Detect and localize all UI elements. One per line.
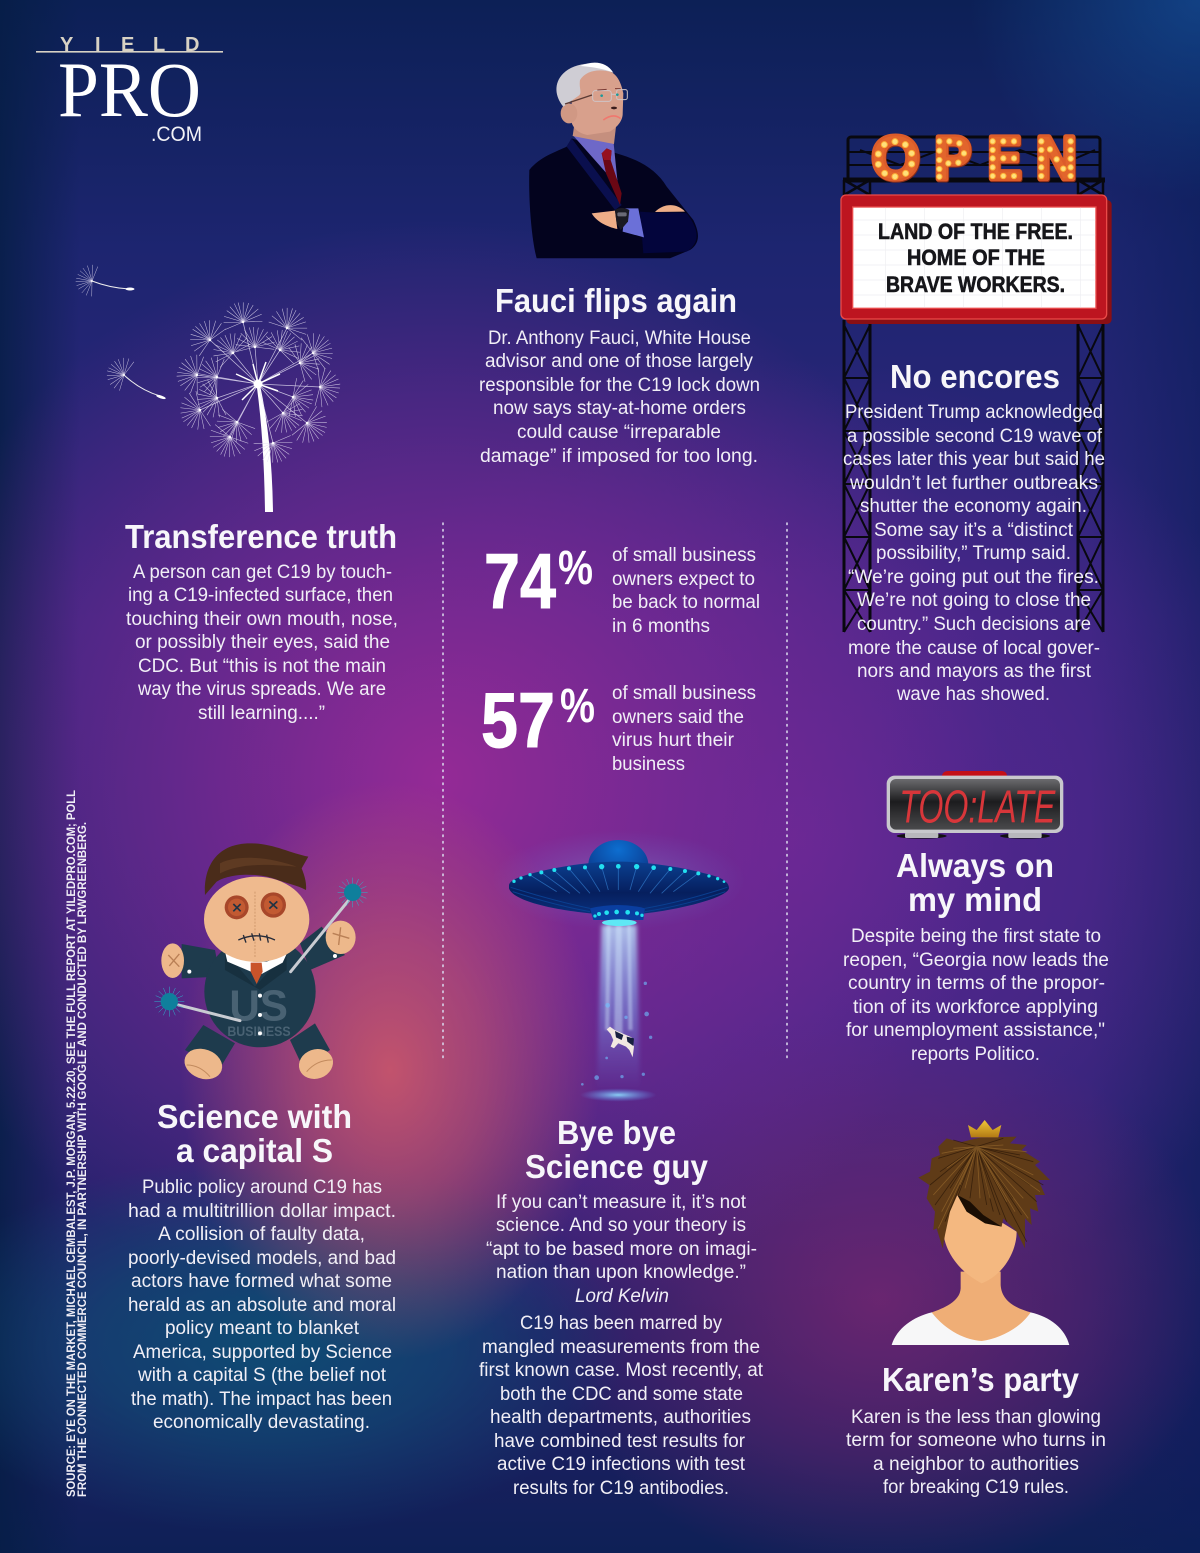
stat: 74%: be back to normal bbox=[612, 592, 760, 613]
heading: Bye bye bbox=[557, 1114, 676, 1151]
text block: could cause “irreparable bbox=[517, 422, 721, 443]
heading: Science with bbox=[157, 1098, 352, 1135]
text block: Public policy around C19 has bbox=[142, 1177, 382, 1198]
logo: YIELD: L bbox=[153, 34, 165, 56]
icon: voodoo doll: BUSINESS bbox=[227, 1023, 291, 1039]
panel: Science with a capital S bbox=[128, 843, 396, 1433]
panel: Bye bye Science guy bbox=[479, 830, 764, 1499]
text block: term for someone who turns in bbox=[846, 1430, 1106, 1451]
text block: A collision of faulty data, bbox=[158, 1224, 365, 1245]
text block: Karen is the less than glowing bbox=[851, 1407, 1101, 1428]
text block: still learning....” bbox=[198, 703, 325, 724]
icon: OPEN marquee letters: O bbox=[872, 125, 920, 192]
stat: 57%: of small business bbox=[612, 683, 756, 704]
panel: Fauci flips again bbox=[479, 63, 760, 467]
icon: alarm clock: TOO:LATE bbox=[899, 780, 1056, 832]
panel: No encores bbox=[841, 125, 1112, 705]
text block: the math). The impact has been bbox=[131, 1389, 392, 1410]
marquee text: HOME OF THE bbox=[907, 245, 1045, 270]
text block: health departments, authorities bbox=[490, 1407, 751, 1428]
text block: reports Politico. bbox=[911, 1044, 1040, 1065]
icon: dandelion bbox=[174, 298, 341, 512]
icon: alarm clock bbox=[887, 771, 1063, 839]
marquee text: BRAVE WORKERS. bbox=[886, 272, 1065, 297]
text block: C19 has been marred by bbox=[520, 1313, 722, 1334]
text block: results for C19 antibodies. bbox=[513, 1478, 729, 1499]
logo: YIELD: E bbox=[121, 34, 134, 56]
text block: Dr. Anthony Fauci, White House bbox=[488, 328, 751, 349]
text block: America, supported by Science bbox=[133, 1342, 392, 1363]
text block: wouldn’t let further outbreaks bbox=[849, 473, 1098, 494]
text block: “apt to be based more on imagi- bbox=[486, 1239, 757, 1260]
source note: FROM THE CONNECTED COMMERCE COUNCIL, IN PARTNERSHIP WITH GOOGLE AND CONDUCTED BY LRWGREENBERG. bbox=[75, 822, 89, 1497]
text block: herald as an absolute and moral bbox=[128, 1295, 396, 1316]
text block: more the cause of local gover- bbox=[848, 638, 1100, 659]
text block: President Trump acknowledged bbox=[845, 402, 1103, 423]
text block: policy meant to blanket bbox=[165, 1318, 360, 1339]
text block: a neighbor to authorities bbox=[873, 1454, 1079, 1475]
logo: .COM: .COM bbox=[151, 123, 202, 146]
heading: Fauci flips again bbox=[495, 282, 737, 319]
icon: Dr. Fauci illustration bbox=[529, 63, 698, 258]
text block: Some say it’s a “distinct bbox=[874, 520, 1074, 541]
text block: shutter the economy again. bbox=[860, 496, 1087, 517]
text block: Despite being the first state to bbox=[851, 926, 1101, 947]
text block: “We’re going put out the fires. bbox=[848, 567, 1099, 588]
stat: 74% bbox=[484, 537, 760, 637]
logo bbox=[36, 34, 223, 146]
text block: for unemployment assistance," bbox=[846, 1020, 1105, 1041]
text block: a possible second C19 wave of bbox=[847, 426, 1103, 447]
heading: Transference truth bbox=[125, 518, 397, 555]
marquee text: LAND OF THE FREE. bbox=[878, 219, 1073, 244]
stat: 57%: 57 bbox=[481, 676, 555, 764]
text block: touching their own mouth, nose, bbox=[126, 609, 398, 630]
stat: 74%: in 6 months bbox=[612, 616, 710, 637]
text block: wave has showed. bbox=[896, 684, 1050, 705]
text block: country in terms of the propor- bbox=[848, 973, 1105, 994]
text block: actors have formed what some bbox=[131, 1271, 392, 1292]
text block: now says stay-at-home orders bbox=[493, 398, 746, 419]
logo: YIELD: I bbox=[95, 34, 101, 56]
text block: science. And so your theory is bbox=[496, 1215, 746, 1236]
stat: 57%: % bbox=[560, 680, 595, 733]
text block: mangled measurements from the bbox=[482, 1337, 760, 1358]
text block: nors and mayors as the first bbox=[857, 661, 1092, 682]
text block: We’re not going to close the bbox=[857, 590, 1091, 611]
text block: ing a C19-infected surface, then bbox=[128, 585, 393, 606]
icon: Karen with crown bbox=[892, 1120, 1069, 1345]
icon: OPEN marquee letters: E bbox=[988, 125, 1022, 192]
text block: economically devastating. bbox=[153, 1412, 370, 1433]
heading: Science guy bbox=[525, 1148, 709, 1185]
stat: 57%: owners said the bbox=[612, 707, 744, 728]
text block: If you can’t measure it, it’s not bbox=[496, 1192, 747, 1213]
heading bbox=[157, 1098, 352, 1169]
text block: had a multitrillion dollar impact. bbox=[128, 1201, 396, 1222]
heading: Always on bbox=[896, 847, 1054, 884]
icon: voodoo doll: US bbox=[229, 982, 288, 1031]
text block: A person can get C19 by touch- bbox=[133, 562, 392, 583]
panel: Transference truth bbox=[74, 262, 398, 724]
stat: 57% bbox=[481, 676, 756, 775]
logo: YIELD: D bbox=[185, 34, 199, 56]
heading: my mind bbox=[908, 881, 1042, 918]
stat: 74%: of small business bbox=[612, 545, 756, 566]
logo: PRO: PRO bbox=[58, 46, 201, 133]
text block: active C19 infections with test bbox=[497, 1454, 746, 1475]
text block: with a capital S (the belief not bbox=[137, 1365, 387, 1386]
text block: responsible for the C19 lock down bbox=[479, 375, 760, 396]
text block: first known case. Most recently, at bbox=[479, 1360, 764, 1381]
heading: No encores bbox=[890, 358, 1060, 395]
heading: Karen’s party bbox=[882, 1361, 1080, 1398]
icon: floating seed 1 bbox=[74, 262, 134, 297]
text block: possibility,” Trump said. bbox=[876, 543, 1071, 564]
stat: 57%: business bbox=[612, 754, 685, 775]
text block: have combined test results for bbox=[494, 1431, 746, 1452]
text block: nation than upon knowledge.” bbox=[496, 1262, 746, 1283]
text block: cases later this year but said he bbox=[843, 449, 1105, 470]
panel: Karen's party bbox=[846, 1120, 1106, 1498]
text block bbox=[126, 562, 398, 724]
logo: YIELD: Y bbox=[60, 34, 74, 56]
logo: YIELD bbox=[36, 34, 223, 56]
text block: reopen, “Georgia now leads the bbox=[843, 950, 1109, 971]
heading bbox=[525, 1114, 709, 1185]
text block bbox=[479, 1192, 764, 1499]
stat: 74%: % bbox=[558, 542, 593, 595]
text block: Lord Kelvin bbox=[575, 1286, 669, 1307]
icon: voodoo doll bbox=[154, 843, 368, 1084]
heading: a capital S bbox=[176, 1132, 333, 1169]
text block: way the virus spreads. We are bbox=[137, 679, 386, 700]
source note bbox=[64, 790, 89, 1497]
icon: OPEN marquee letters: P bbox=[934, 125, 971, 192]
icon: OPEN marquee letters: N bbox=[1036, 125, 1077, 192]
stat: 74%: owners expect to bbox=[612, 569, 755, 590]
text block bbox=[846, 1407, 1106, 1498]
icon: UFO abducting a cow bbox=[492, 830, 745, 1102]
icon: sign structure bbox=[843, 137, 1105, 632]
text block bbox=[843, 926, 1109, 1065]
text block: CDC. But “this is not the main bbox=[138, 656, 386, 677]
icon: OPEN marquee letters bbox=[872, 125, 1077, 192]
text block: both the CDC and some state bbox=[500, 1384, 743, 1405]
text block: advisor and one of those largely bbox=[485, 351, 753, 372]
text block: poorly-devised models, and bad bbox=[128, 1248, 396, 1269]
panel: Always on my mind bbox=[843, 771, 1109, 1065]
stat: 74%: 74 bbox=[484, 537, 556, 625]
marquee board bbox=[841, 195, 1112, 324]
stat: 57%: virus hurt their bbox=[612, 730, 735, 751]
marquee text bbox=[878, 219, 1073, 297]
text block: or possibly their eyes, said the bbox=[135, 632, 390, 653]
text block bbox=[479, 328, 760, 467]
text block: tion of its workforce applying bbox=[853, 997, 1098, 1018]
heading bbox=[896, 847, 1054, 918]
text block: damage” if imposed for too long. bbox=[480, 446, 758, 467]
text block bbox=[843, 402, 1105, 705]
text block: country.” Such decisions are bbox=[857, 614, 1091, 635]
source note: SOURCE: EYE ON THE MARKET, MICHAEL CEMBALEST, J.P. MORGAN, 5.22.20, SEE THE FULL REPORT AT YILEDPRO.COM; POLL bbox=[64, 790, 78, 1497]
text block bbox=[128, 1177, 396, 1433]
text block: for breaking C19 rules. bbox=[883, 1477, 1069, 1498]
icon: floating seed 2 bbox=[102, 352, 166, 400]
